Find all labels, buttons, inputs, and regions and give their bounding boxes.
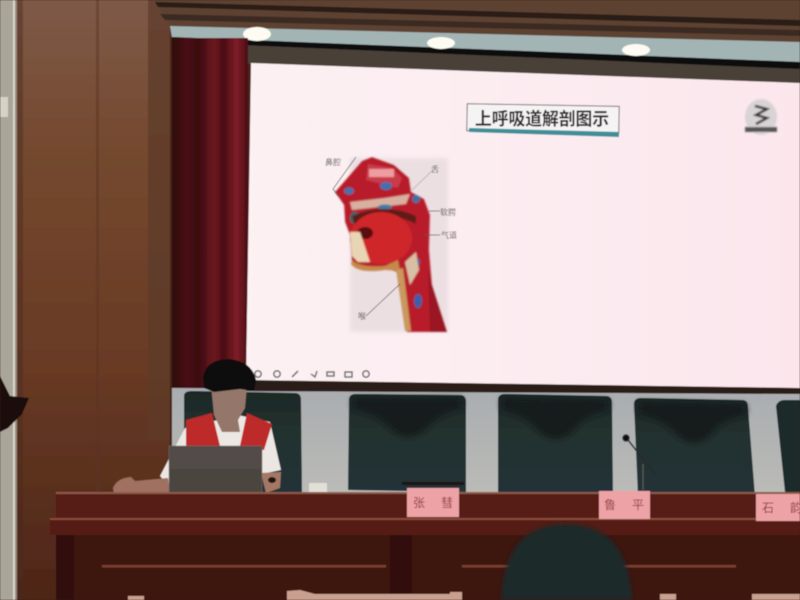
red vest <box>186 413 272 450</box>
face and neck <box>211 385 247 432</box>
empty chairs <box>184 391 800 496</box>
diagram labels: 软腭 <box>440 207 456 217</box>
name card: 张 彗: 张 <box>413 496 425 510</box>
slide toolbar icons <box>255 371 369 377</box>
grey back wall <box>172 388 800 500</box>
dark oral roof <box>352 209 416 224</box>
microphone <box>623 435 655 490</box>
name card: 张 彗: 彗 <box>441 496 453 510</box>
foreground audience head <box>501 524 632 600</box>
left foreground dark object <box>0 376 29 432</box>
anatomy diagram: upper respiratory tract <box>325 157 457 332</box>
diagram labels: 气道 <box>441 230 457 240</box>
screen lower frame <box>240 378 800 394</box>
ceiling light 3 <box>622 44 650 56</box>
paper cup <box>309 483 327 495</box>
red curtain <box>172 38 248 438</box>
diagram labels <box>325 157 457 321</box>
ceiling band <box>155 0 800 45</box>
name card: 张 彗 <box>407 488 459 517</box>
chair 3 <box>498 394 613 494</box>
name card: cropped <box>756 494 800 521</box>
diagram background panel <box>350 158 448 332</box>
slide title box <box>467 104 619 137</box>
chair 1 behind presenter <box>184 391 302 492</box>
head section silhouette <box>335 157 447 332</box>
conference table <box>50 492 800 600</box>
ceiling light 2 <box>427 37 455 49</box>
chair 5 cropped <box>776 400 800 494</box>
tongue <box>350 212 412 264</box>
wood pillar <box>15 0 170 600</box>
blue vessels <box>380 182 392 190</box>
throat and neck <box>396 268 411 331</box>
presenter <box>113 359 281 494</box>
left arm and hand <box>113 477 170 494</box>
white t-shirt <box>160 415 281 490</box>
laptop <box>169 446 262 495</box>
hair <box>203 359 256 392</box>
slide logo <box>745 99 777 135</box>
table microphones <box>268 477 464 485</box>
ceiling light 1 <box>243 27 271 41</box>
lips and jaw <box>350 232 370 262</box>
name card: cropped: 石 <box>762 501 774 515</box>
diagram labels: 鼻腔 <box>325 157 341 167</box>
chair 2 <box>348 394 466 492</box>
right arm <box>261 472 281 493</box>
slide title box: 上呼吸道解剖图示 <box>475 109 609 129</box>
projection screen <box>246 63 800 388</box>
name card: 鲁 平: 鲁 <box>604 498 616 512</box>
name card: 鲁 平: 平 <box>632 498 644 512</box>
nasal cavity <box>366 164 402 188</box>
leader lines <box>333 157 440 316</box>
diagram labels: 舌 <box>431 164 439 174</box>
ceiling recess with lights <box>170 26 800 84</box>
name card: 鲁 平 <box>599 491 650 519</box>
foreground seat edges <box>128 590 800 600</box>
chair 4 <box>634 398 755 496</box>
diagram labels: 喉 <box>358 311 366 321</box>
